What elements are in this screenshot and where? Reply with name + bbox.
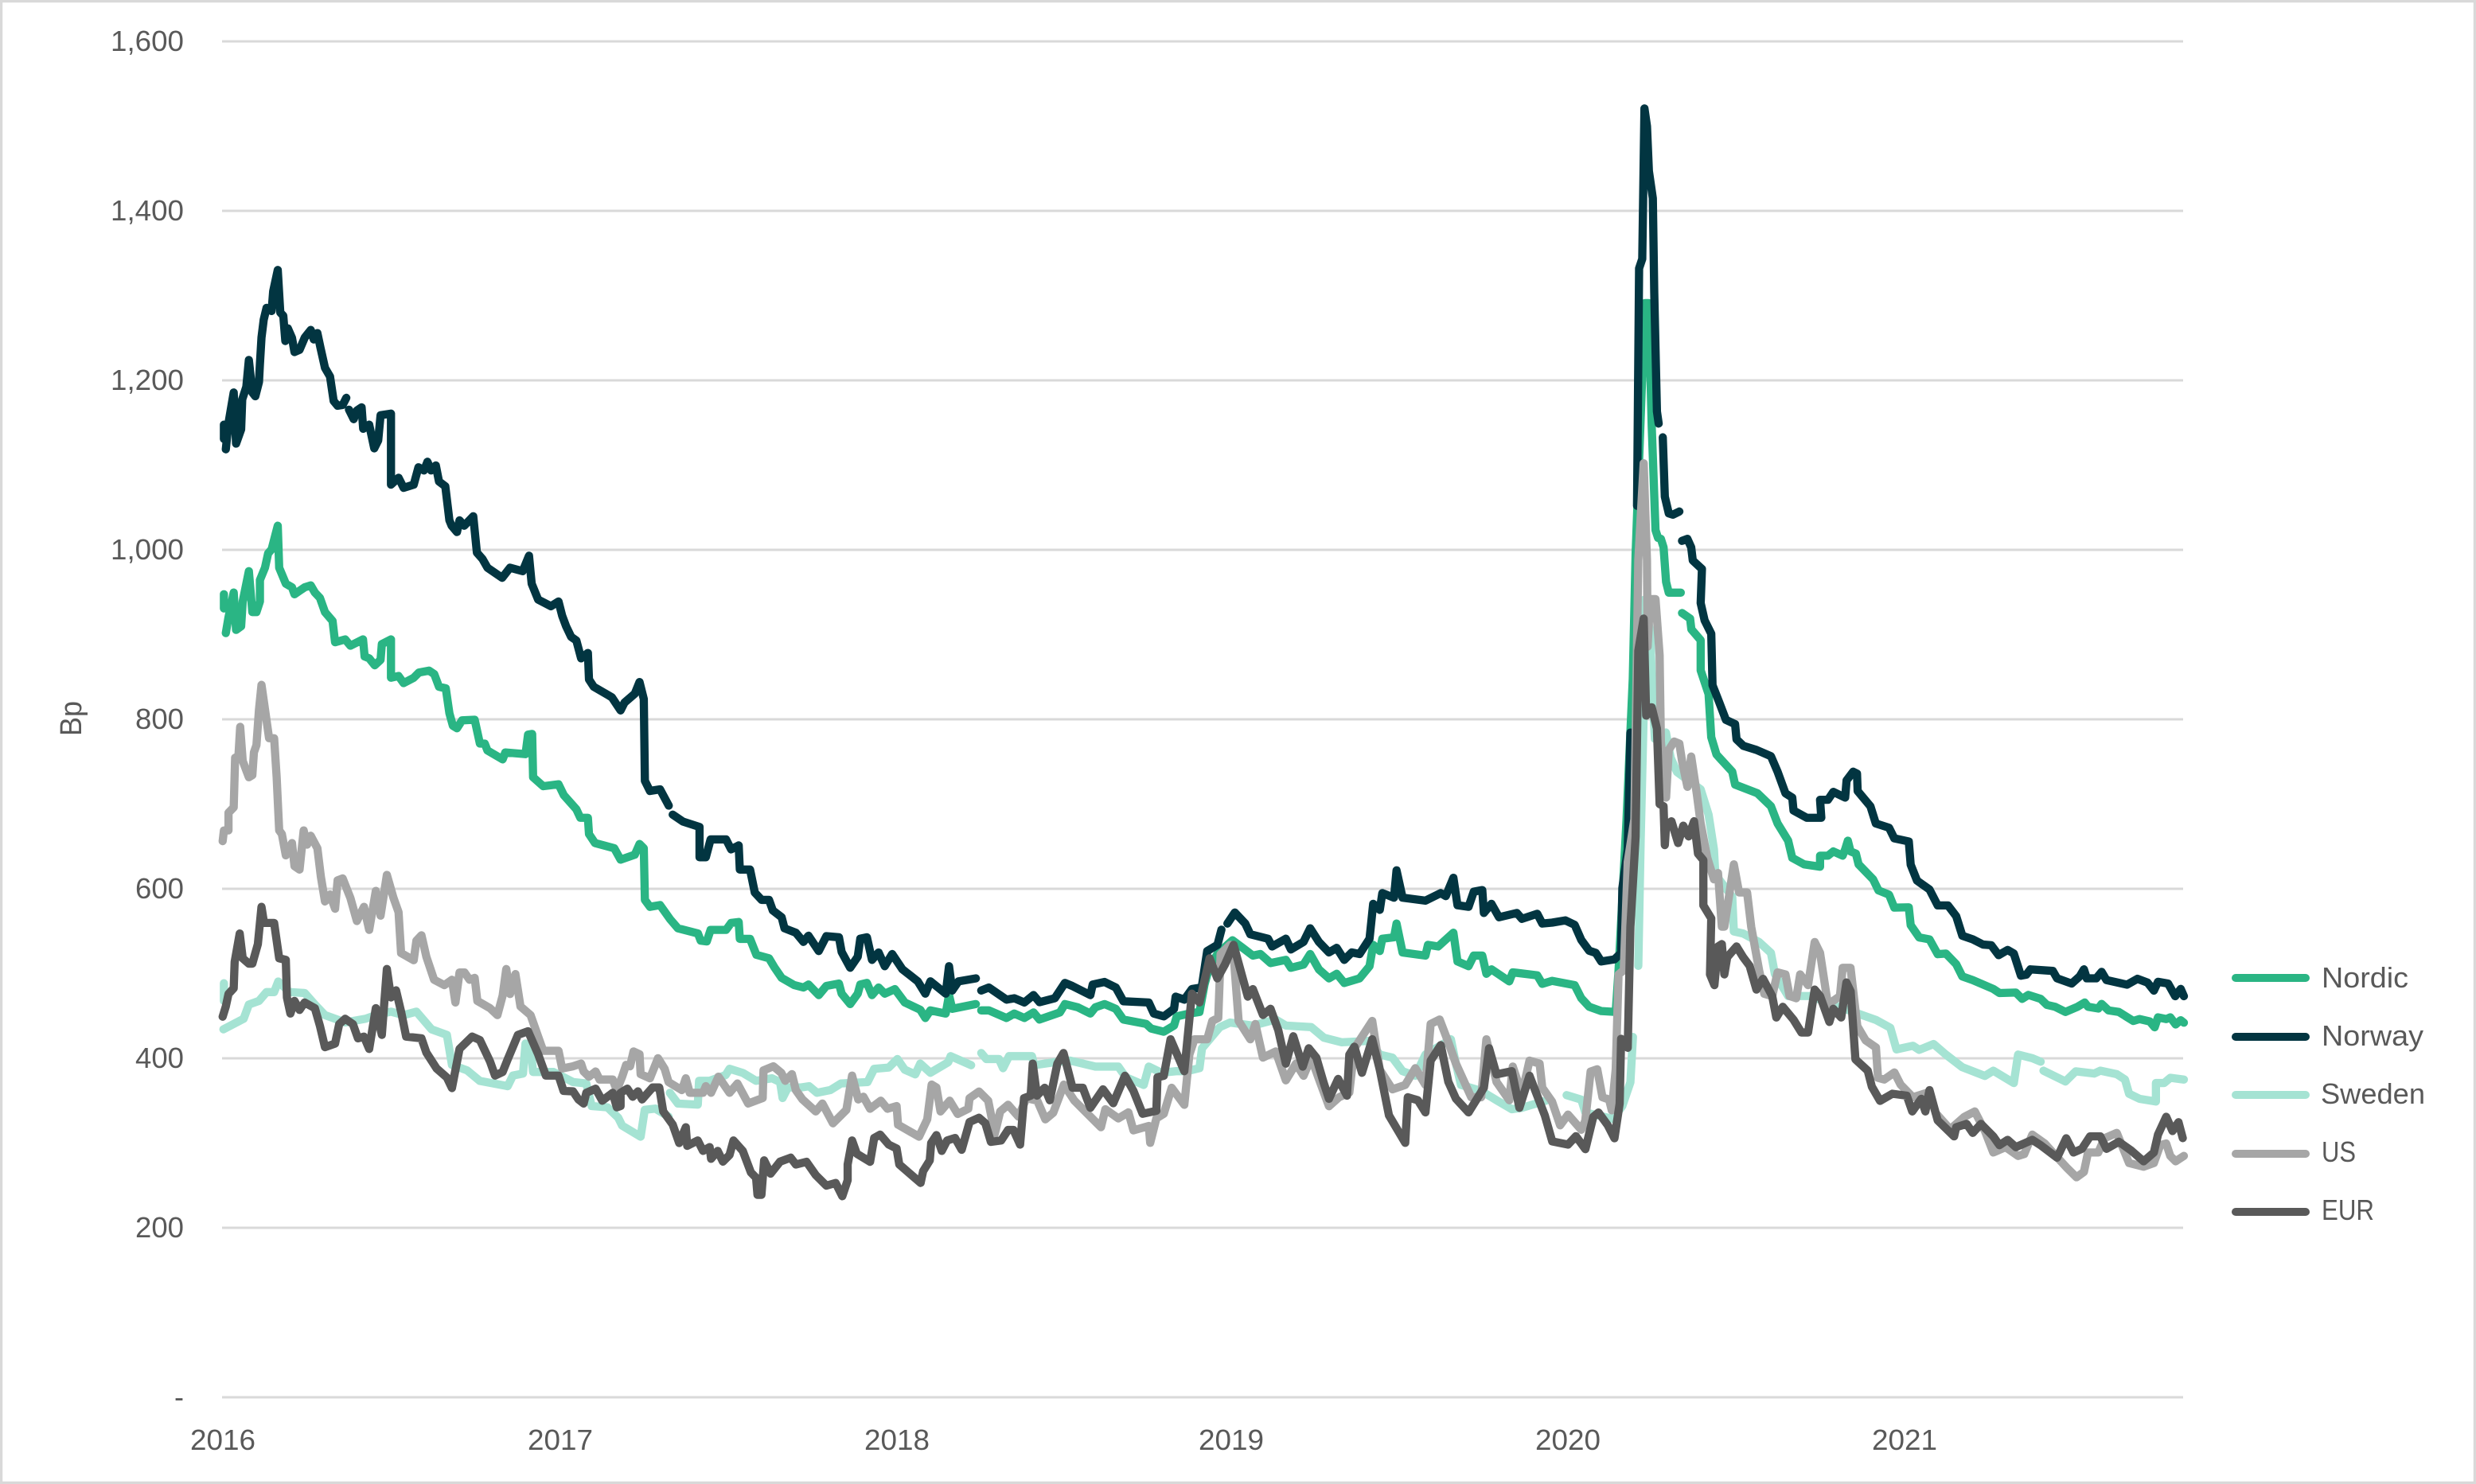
y axis labels: 1,000 bbox=[111, 533, 184, 566]
x axis labels: 2020 bbox=[1535, 1424, 1601, 1456]
x axis labels: 2017 bbox=[528, 1424, 593, 1456]
legend bbox=[2236, 961, 2425, 1226]
x axis labels bbox=[190, 1424, 1937, 1456]
x axis labels: 2021 bbox=[1872, 1424, 1937, 1456]
legend item: US: US bbox=[2322, 1135, 2356, 1168]
y axis labels: 200 bbox=[135, 1211, 184, 1244]
y axis labels: 800 bbox=[135, 703, 184, 735]
legend item: Sweden: Sweden bbox=[2321, 1077, 2425, 1110]
line chart bbox=[223, 108, 2184, 1196]
y axis labels: 1,200 bbox=[111, 364, 184, 396]
series: US bbox=[223, 463, 2184, 1178]
series: Norway bbox=[224, 108, 2184, 1016]
y axis labels: 1,400 bbox=[111, 194, 184, 227]
y axis labels: 400 bbox=[135, 1042, 184, 1074]
series: EUR bbox=[223, 618, 2183, 1196]
legend item: EUR: EUR bbox=[2322, 1194, 2374, 1226]
y axis labels: 600 bbox=[135, 872, 184, 905]
y axis title: Bp bbox=[55, 701, 88, 736]
x axis labels: 2018 bbox=[864, 1424, 930, 1456]
series: Sweden bbox=[224, 600, 2184, 1137]
legend item: Nordic: Nordic bbox=[2322, 961, 2408, 994]
x axis labels: 2019 bbox=[1199, 1424, 1264, 1456]
y axis labels: 1,600 bbox=[111, 25, 184, 57]
y axis labels bbox=[111, 25, 184, 1413]
legend item: Norway: Norway bbox=[2322, 1019, 2423, 1052]
x axis labels: 2016 bbox=[190, 1424, 255, 1456]
series: Nordic bbox=[224, 303, 2184, 1032]
y axis labels: - bbox=[174, 1381, 184, 1413]
